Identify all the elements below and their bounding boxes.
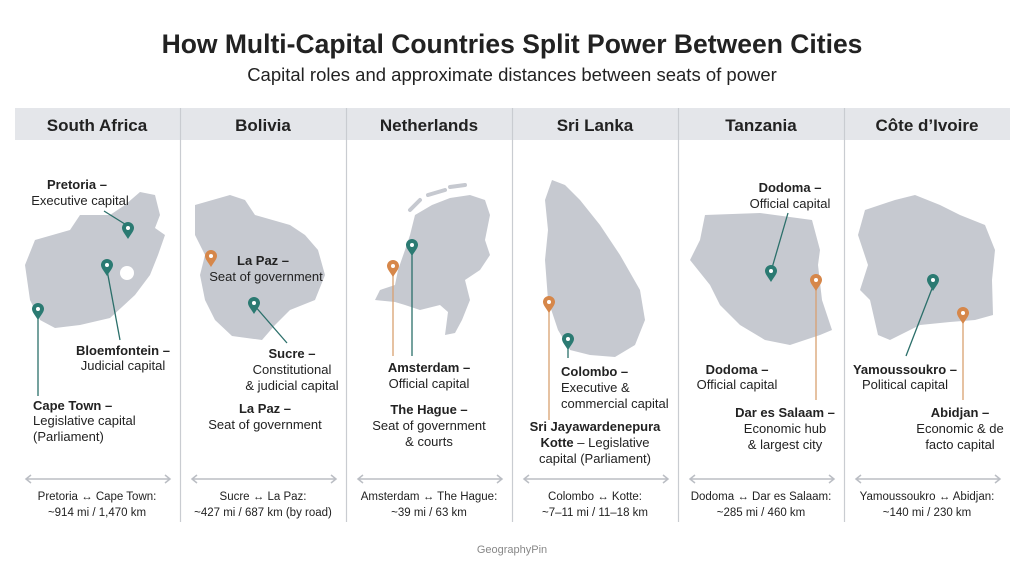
- distance labels: Colombo ↔ Kotte:: [548, 491, 642, 503]
- panel: Tanzania: [690, 180, 835, 452]
- panel: Bolivia: Sucre –: [269, 346, 315, 361]
- panel: South Africa: Pretoria –: [47, 177, 107, 192]
- panel: Tanzania: Official capital: [750, 196, 830, 211]
- panel: Sri Lanka: commercial capital: [561, 396, 669, 411]
- distance labels: ~914 mi / 1,470 km: [48, 507, 146, 519]
- map: Sri Lanka: [545, 180, 645, 357]
- panel: Bolivia: Constitutional: [253, 362, 331, 377]
- panel: Tanzania: Dar es Salaam –: [735, 405, 835, 420]
- distance labels: Dodoma ↔ Dar es Salaam:: [691, 491, 831, 503]
- panel: Netherlands: The Hague –: [390, 402, 468, 417]
- distance labels: ~285 mi / 460 km: [717, 507, 805, 519]
- distance labels: Pretoria ↔ Cape Town:: [38, 491, 156, 503]
- distance labels: Amsterdam ↔ The Hague:: [361, 491, 497, 503]
- distance arrows: [26, 475, 1000, 483]
- panel: Tanzania: Economic hub: [744, 421, 826, 436]
- panel: Netherlands: Seat of government: [372, 418, 486, 433]
- distance labels: ~7–11 mi / 11–18 km: [542, 507, 648, 519]
- panel: Netherlands: & courts: [405, 434, 453, 449]
- header band: [15, 108, 1010, 140]
- header band: Netherlands: [380, 116, 478, 135]
- panel: Bolivia: Seat of government: [209, 269, 323, 284]
- panel: South Africa: Judicial capital: [81, 358, 165, 373]
- panel: Tanzania: Dodoma –: [759, 180, 821, 195]
- footer credit: GeographyPin: [477, 544, 547, 556]
- header band: Tanzania: [725, 116, 797, 135]
- panel: Côte d'Ivoire: Economic & de: [916, 421, 1004, 436]
- distance labels: Yamoussoukro ↔ Abidjan:: [860, 491, 994, 503]
- panel: Netherlands: Amsterdam –: [388, 360, 470, 375]
- panel: Côte d'Ivoire: [853, 195, 1004, 452]
- panel: South Africa: Bloemfontein –: [76, 343, 170, 358]
- panel: Tanzania: Dodoma –: [706, 362, 768, 377]
- map: Côte d'Ivoire: [858, 195, 995, 340]
- panel: South Africa: Legislative capital: [33, 413, 136, 428]
- distance labels: [38, 491, 994, 519]
- panel: Bolivia: & judicial capital: [245, 378, 339, 393]
- distance labels: Sucre ↔ La Paz:: [220, 491, 306, 503]
- panel: Sri Lanka: Executive &: [561, 380, 630, 395]
- panel: South Africa: [25, 177, 170, 444]
- header band: Sri Lanka: [557, 116, 634, 135]
- distance labels: ~427 mi / 687 km (by road): [194, 507, 332, 519]
- panel: South Africa: Executive capital: [31, 193, 129, 208]
- panel: Sri Lanka: [530, 180, 669, 466]
- map: South Africa: [25, 192, 165, 328]
- panel: Sri Lanka: Kotte – Legislative: [540, 435, 650, 450]
- panel: Tanzania: & largest city: [748, 437, 823, 452]
- panel: South Africa: (Parliament): [33, 429, 104, 444]
- map: Tanzania: [690, 213, 832, 345]
- panel: Côte d'Ivoire: facto capital: [925, 437, 995, 452]
- panel: Côte d'Ivoire: Political capital: [862, 377, 948, 392]
- header band: Côte d’Ivoire: [876, 116, 978, 135]
- panel: Sri Lanka: capital (Parliament): [539, 451, 651, 466]
- panel: Sri Lanka: Sri Jayawardenepura: [530, 419, 661, 434]
- panel: Netherlands: [372, 185, 490, 449]
- map: Netherlands: [375, 195, 490, 335]
- panel: Sri Lanka: Colombo –: [561, 364, 628, 379]
- panel: Bolivia: Seat of government: [208, 417, 322, 432]
- panel: Bolivia: La Paz –: [239, 401, 291, 416]
- panel: South Africa: Cape Town –: [33, 398, 112, 413]
- header band: Bolivia: [235, 116, 291, 135]
- panel: Bolivia: La Paz –: [237, 253, 289, 268]
- subtitle: Capital roles and approximate distances between seats of power: [247, 64, 777, 85]
- distance labels: ~39 mi / 63 km: [391, 507, 467, 519]
- header band: South Africa: [47, 116, 148, 135]
- distance labels: ~140 mi / 230 km: [883, 507, 971, 519]
- panel: Côte d'Ivoire: Yamoussoukro –: [853, 362, 957, 377]
- icon: pins: [32, 222, 134, 320]
- panel: Côte d'Ivoire: Abidjan –: [931, 405, 989, 420]
- panel: Netherlands: Official capital: [389, 376, 469, 391]
- title: How Multi-Capital Countries Split Power Between Cities: [162, 29, 862, 59]
- panel: Tanzania: Official capital: [697, 377, 777, 392]
- map: Bolivia: [195, 195, 325, 340]
- panel: Bolivia: [195, 195, 339, 432]
